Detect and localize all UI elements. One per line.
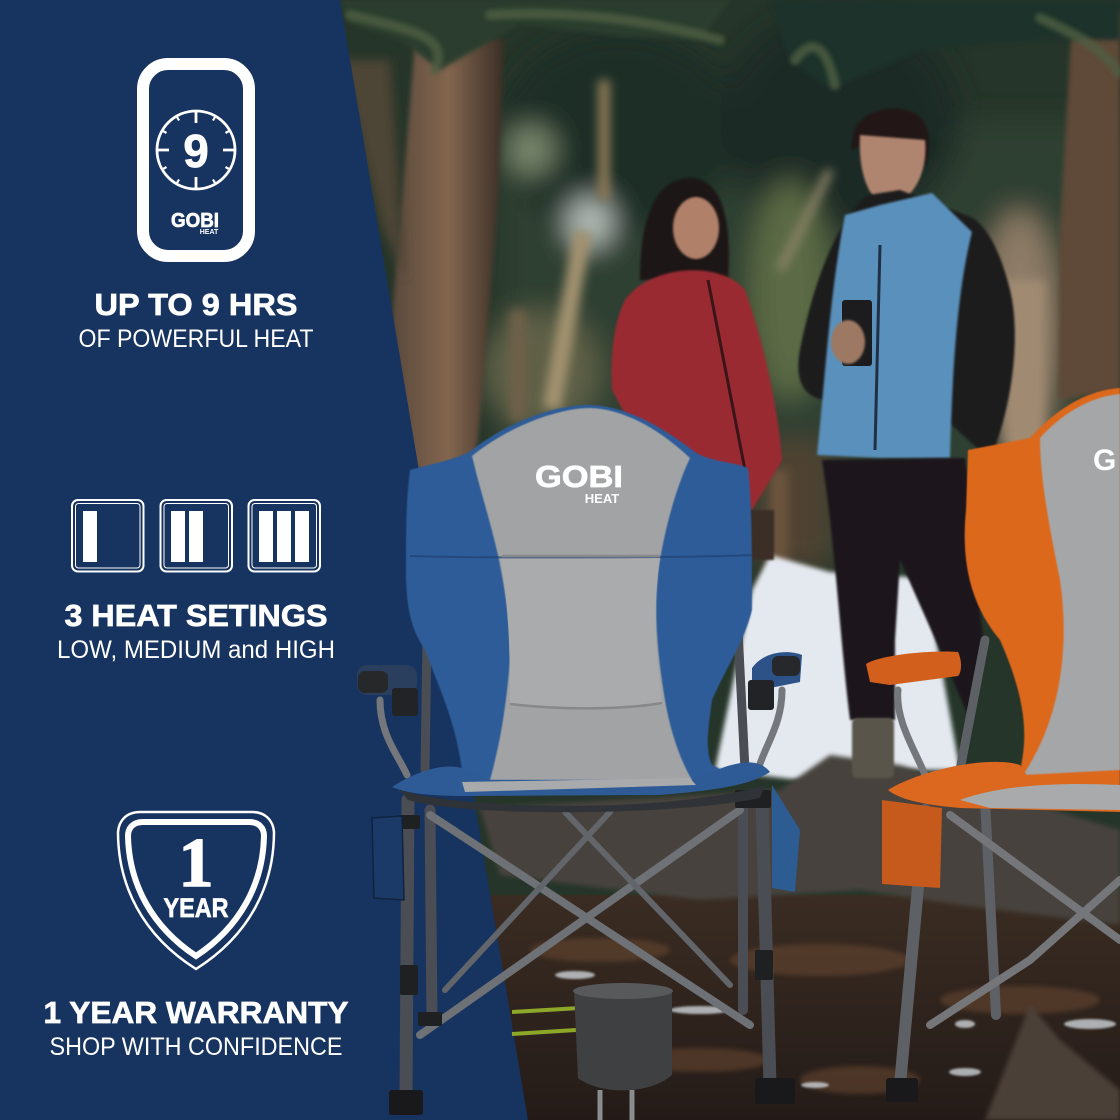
- orange chair feet: [886, 1078, 918, 1102]
- orange chair frame: [898, 640, 1120, 1085]
- photo: overhanging branches: [340, 0, 1120, 90]
- subheading: low medium high: LOW, MEDIUM and HIGH: [57, 636, 335, 664]
- heading: 1 year warranty: 1 YEAR WARRANTY: [44, 995, 349, 1030]
- photo: woman in red jacket: [612, 178, 782, 560]
- seat back grey center: [472, 408, 692, 780]
- orange chair logo: G: [1093, 444, 1116, 477]
- orange pocket: [882, 800, 942, 888]
- chair logo: GOBI: [535, 459, 623, 494]
- setting low: [72, 500, 144, 572]
- logo: GOBI: [171, 210, 219, 232]
- seat back blue fabric: [406, 405, 752, 790]
- logo sub-label: HEAT: [200, 229, 219, 236]
- photo: tree trunks: [340, 10, 1120, 1120]
- blue heated chair: [357, 405, 802, 1115]
- seam lines: [410, 555, 752, 708]
- orange chair armrest: [866, 652, 961, 685]
- icon: 1 year shield: [118, 812, 274, 969]
- icon: heat settings: [72, 500, 320, 572]
- timer dial: [157, 111, 235, 189]
- subheading: shop with confidence: SHOP WITH CONFIDENCE: [50, 1033, 342, 1061]
- right armrest: [748, 652, 802, 710]
- subheading: of powerful heat: OF POWERFUL HEAT: [78, 325, 314, 353]
- timer number: 9: [183, 125, 209, 177]
- chair feet: [389, 1090, 423, 1115]
- shield number: 1: [178, 825, 214, 902]
- photo: snow: [715, 555, 960, 780]
- side pockets: [372, 816, 404, 900]
- photo: fallen log: [480, 755, 1120, 925]
- orange heated chair: [866, 388, 1120, 1102]
- camp pot: [512, 983, 673, 1120]
- orange seat back: [965, 388, 1120, 800]
- left armrest: [357, 665, 418, 716]
- orange seat cushion: [888, 762, 1120, 812]
- seat cushion: [392, 762, 770, 796]
- left navy panel: [0, 0, 528, 1120]
- icon: battery with 9 hour timer: [143, 64, 249, 256]
- photo: forest floor: [480, 895, 1120, 1120]
- chair legs and frame: [380, 630, 782, 1095]
- chair joints: [398, 790, 773, 1026]
- orange chair grey panel: [1023, 394, 1120, 775]
- setting high: [248, 500, 320, 572]
- chair logo sub-label: HEAT: [585, 491, 619, 506]
- heading: 3 heat setings: 3 HEAT SETINGS: [64, 598, 328, 633]
- setting medium: [160, 500, 232, 572]
- heading: up to 9 hrs: UP TO 9 HRS: [94, 287, 298, 322]
- shield label: YEAR: [164, 893, 228, 923]
- photo: man in blue vest: [798, 109, 1015, 778]
